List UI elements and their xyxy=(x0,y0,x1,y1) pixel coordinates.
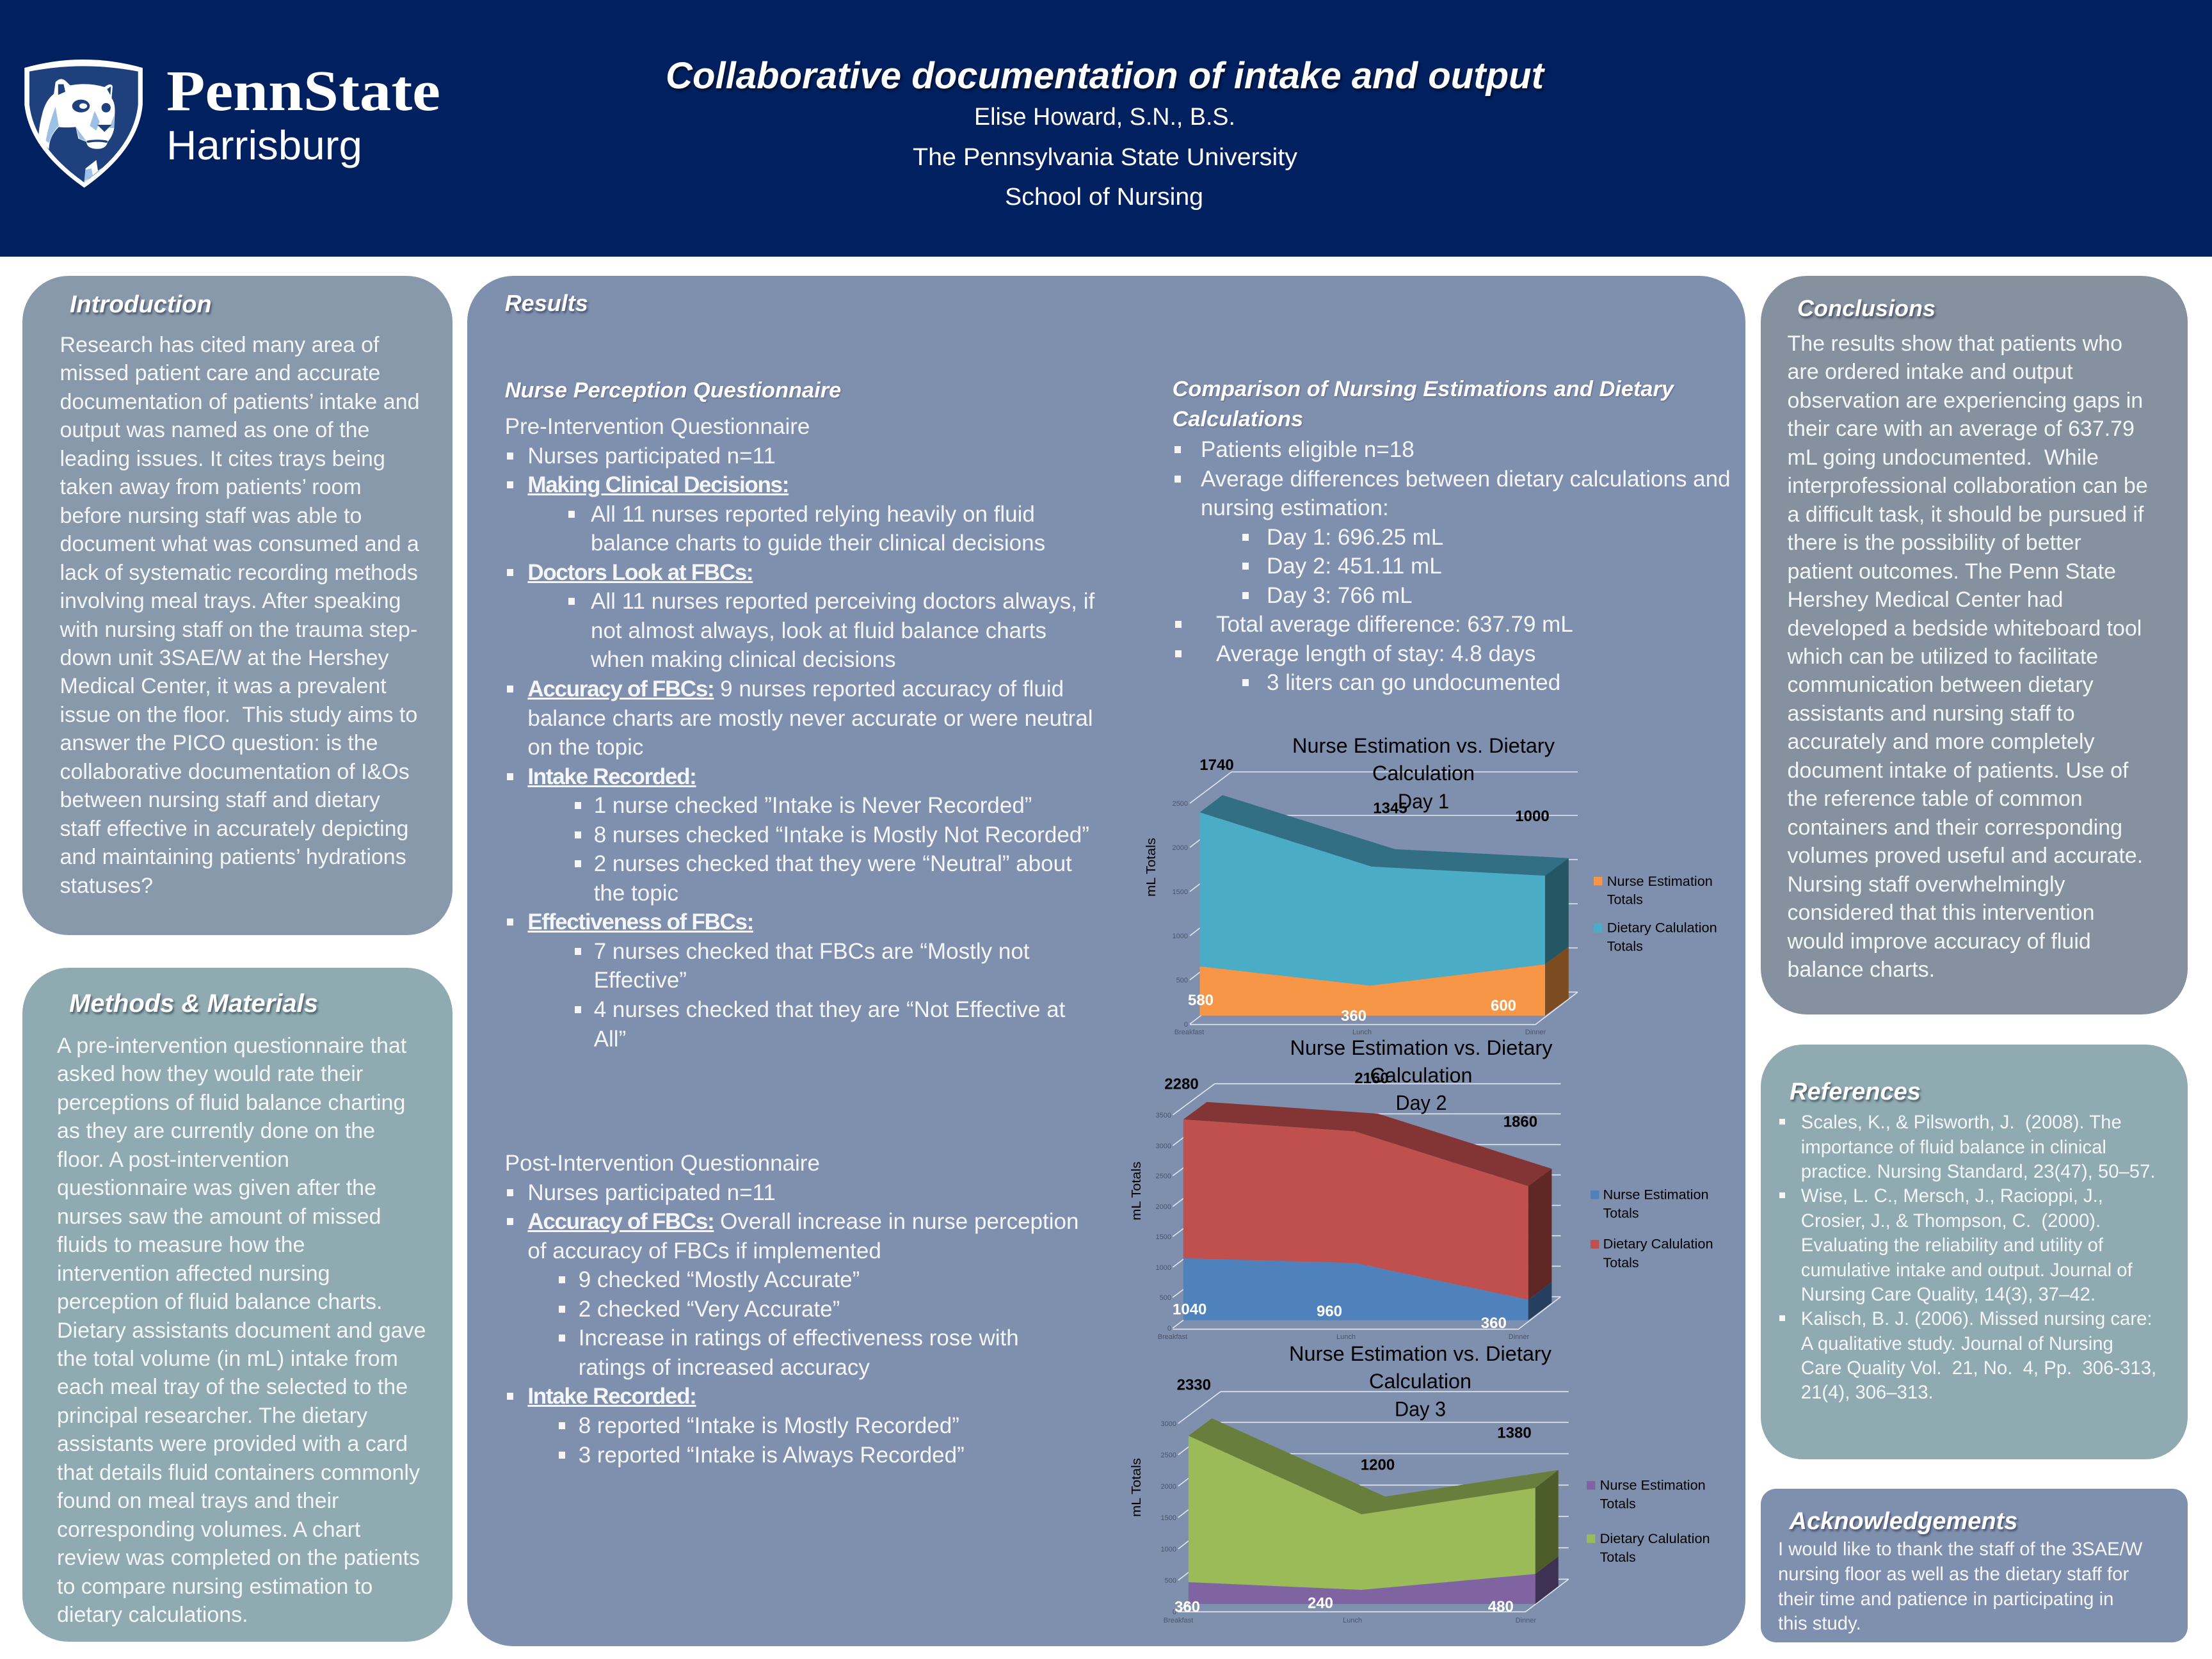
legend: Dietary Calulation xyxy=(1600,1532,1710,1546)
text: post-intervention questionnaire: Intake Recorded: xyxy=(527,1384,696,1409)
text: pre-intervention questionnaire: Pre-Intervention Questionnaire xyxy=(505,414,810,439)
chart title xyxy=(1289,1342,1551,1420)
text: post-intervention questionnaire xyxy=(505,1151,1078,1468)
data labels: 960 xyxy=(1317,1303,1342,1320)
text: pre-intervention questionnaire: All 11 nurses reported relying heavily on fluid xyxy=(591,502,1035,527)
text: pre-intervention questionnaire: All 11 nurses reported perceiving doctors always, if xyxy=(591,589,1094,614)
text: reference list: A qualitative study. Journal of Nursing xyxy=(1801,1333,2113,1354)
y-axis label: mL Totals xyxy=(1130,1162,1144,1221)
gridlines and axes: Lunch xyxy=(1336,1333,1356,1341)
chart: Day 2 area chart xyxy=(1130,1036,1713,1341)
panel: references xyxy=(1761,1045,2188,1459)
data labels: 240 xyxy=(1308,1595,1333,1612)
text: post-intervention questionnaire: Nurses participated n=11 xyxy=(527,1180,776,1205)
author: Elise Howard, S.N., B.S. xyxy=(974,104,1235,131)
text: post-intervention questionnaire: Post-Intervention Questionnaire xyxy=(505,1151,820,1176)
legend: Totals xyxy=(1600,1497,1636,1512)
text: pre-intervention questionnaire: Doctors Look at FBCs: xyxy=(527,560,753,585)
panel: acknowledgements xyxy=(1761,1489,2188,1642)
text: pre-intervention questionnaire: Making Clinical Decisions: xyxy=(527,472,789,497)
legend: Dietary Calulation xyxy=(1607,921,1717,936)
data labels: 2280 xyxy=(1164,1076,1199,1093)
text: pre-intervention questionnaire: 2 nurses checked that they were “Neutral” about xyxy=(594,851,1072,876)
text: pre-intervention questionnaire: Accuracy of FBCs: 9 nurses reported accuracy of fluid xyxy=(527,677,1064,701)
gridlines and axes: 2500 xyxy=(1161,1452,1176,1459)
data labels: 1740 xyxy=(1199,757,1234,774)
text: reference list: Care Quality Vol. 21, No. 4, Pp. 306-313, xyxy=(1801,1358,2156,1379)
text: reference list: Evaluating the reliability and utility of xyxy=(1801,1235,2103,1256)
legend xyxy=(1591,1187,1713,1270)
gridlines and axes: Dinner xyxy=(1516,1617,1537,1624)
area: nurse estimation totals xyxy=(1199,947,1569,1016)
data labels: 360 xyxy=(1341,1007,1366,1025)
gridlines and axes: Lunch xyxy=(1343,1617,1362,1624)
text: pre-intervention questionnaire: Intake Recorded: xyxy=(527,764,696,789)
text: comparison findings: Day 2: 451.11 mL xyxy=(1267,554,1442,579)
gridlines and axes: 3000 xyxy=(1156,1142,1171,1150)
text: methods body: A pre-intervention questionnaire that asked how they would rate their perceptions of fluid balance charting as they are currently done on the floor. A post-intervention questionnaire was given after the nurses saw the amount of missed fluids to measure how the intervention affected nursing perception of fluid balance charts. Dietary assistants document and gave the total volume (in mL) intake from each meal tray of the selected to the principal researcher. The dietary assistants were provided with a card that details fluid containers commonly found on meal trays and their corresponding volumes. A chart review was completed on the patients to compare nursing estimation to dietary calculations. xyxy=(57,1034,426,1627)
data labels: 1860 xyxy=(1503,1114,1537,1131)
gridlines and axes: Lunch xyxy=(1352,1029,1372,1036)
gridlines and axes: 2000 xyxy=(1173,844,1188,852)
text: pre-intervention questionnaire: on the topic xyxy=(527,735,643,760)
data labels: 580 xyxy=(1188,992,1214,1009)
panel: methods and materials xyxy=(22,968,453,1642)
gridlines and axes: 1500 xyxy=(1161,1514,1176,1522)
gridlines and axes: 1000 xyxy=(1156,1264,1171,1272)
text: reference list: cumulative intake and output. Journal of xyxy=(1801,1260,2133,1281)
legend: Nurse Estimation xyxy=(1600,1479,1706,1493)
area: dietary calculation totals xyxy=(1189,1418,1559,1590)
gridlines and axes: 1500 xyxy=(1173,888,1188,896)
text: pre-intervention questionnaire: 1 nurse checked ”Intake is Never Recorded” xyxy=(594,793,1032,818)
subheading: Comparison of Nursing Estimations and Dietary Calculations: Comparison of Nursing Estimations and Dietary Calculations xyxy=(1173,377,1674,431)
gridlines and axes: 2500 xyxy=(1173,800,1188,808)
text: comparison findings: 3 liters can go undocumented xyxy=(1267,670,1560,695)
text: comparison findings: Average differences between dietary calculations and xyxy=(1201,467,1731,492)
gridlines and axes xyxy=(1161,1391,1569,1624)
gridlines and axes: 1500 xyxy=(1156,1233,1171,1241)
legend xyxy=(1594,874,1717,954)
title: Collaborative documentation of intake and output xyxy=(666,55,1546,97)
text: pre-intervention questionnaire: balance charts to guide their clinical decisions xyxy=(591,531,1045,556)
chart title: Day 2 xyxy=(1395,1091,1447,1114)
text: pre-intervention questionnaire: 8 nurses checked “Intake is Mostly Not Recorded” xyxy=(594,822,1089,847)
wordmark: Harrisburg: Harrisburg xyxy=(166,122,362,168)
gridlines and axes: 2000 xyxy=(1156,1203,1171,1211)
data labels xyxy=(1188,757,1550,1025)
text: reference list: Kalisch, B. J. (2006). Missed nursing care: xyxy=(1801,1308,2152,1329)
text: post-intervention questionnaire: of accuracy of FBCs if implemented xyxy=(527,1238,881,1263)
data labels: 2330 xyxy=(1177,1377,1211,1394)
gridlines and axes: Dinner xyxy=(1525,1029,1546,1036)
legend: Dietary Calulation xyxy=(1603,1237,1713,1252)
panel: results xyxy=(467,276,1745,1646)
y-axis label: mL Totals xyxy=(1130,1458,1144,1517)
y-axis label: mL Totals xyxy=(1144,838,1158,897)
heading: Results: Results xyxy=(505,289,588,316)
text: pre-intervention questionnaire: the topic xyxy=(594,881,678,906)
legend xyxy=(1587,1479,1710,1565)
data labels: 1345 xyxy=(1373,800,1407,817)
text: pre-intervention questionnaire: when making clinical decisions xyxy=(591,647,896,672)
text: pre-intervention questionnaire: not almost always, look at fluid balance charts xyxy=(591,618,1046,643)
legend: Totals xyxy=(1603,1256,1639,1270)
data labels xyxy=(1174,1377,1532,1615)
legend: Totals xyxy=(1603,1206,1639,1221)
text: reference list: Scales, K., & Pilsworth, J. (2008). The xyxy=(1801,1112,2122,1133)
text: reference list: 21(4), 306–313. xyxy=(1801,1382,1934,1403)
chart title xyxy=(1292,734,1555,813)
chart: Day 1 area chart xyxy=(1144,734,1717,1036)
data labels: 360 xyxy=(1174,1598,1200,1615)
chart title: Calculation xyxy=(1370,1064,1472,1087)
text: comparison findings xyxy=(1174,437,1731,695)
area: dietary calculation totals xyxy=(1183,1102,1551,1300)
wordmark: PennState: PennState xyxy=(166,60,440,123)
chart title: Calculation xyxy=(1369,1370,1471,1393)
text: acknowledgements body: I would like to thank the staff of the 3SAE/W nursing floor as well as the dietary staff for their time and patience in participating in this study. xyxy=(1778,1539,2142,1634)
gridlines and axes xyxy=(1156,1084,1560,1341)
gridlines and axes: 1000 xyxy=(1161,1546,1176,1553)
text: pre-intervention questionnaire: Effective” xyxy=(594,968,687,993)
gridlines and axes: Breakfast xyxy=(1174,1029,1204,1036)
gridlines and axes xyxy=(1173,772,1578,1036)
text: post-intervention questionnaire: ratings of increased accuracy xyxy=(579,1355,870,1380)
text: pre-intervention questionnaire: 7 nurses checked that FBCs are “Mostly not xyxy=(594,939,1030,964)
text: pre-intervention questionnaire xyxy=(505,414,1094,1052)
text: post-intervention questionnaire: 2 checked “Very Accurate” xyxy=(579,1297,840,1322)
gridlines and axes: 3000 xyxy=(1161,1420,1176,1428)
data labels: 360 xyxy=(1481,1315,1507,1332)
text: conclusions body: The results show that patients who are ordered intake and output observation are experiencing gaps in their care with an average of 637.79 mL going undocumented. While interprofessional collaboration can be a difficult task, it should be pursued if there is the possibility of better patient outcomes. The Penn State Hershey Medical Center had developed a bedside whiteboard tool which can be utilized to facilitate communication between dietary assistants and nursing staff to accurately and more completely document intake of patients. Use of the reference table of common containers and their corresponding volumes proved useful and accurate. Nursing staff overwhelmingly considered that this intervention would improve accuracy of fluid balance charts. xyxy=(1787,332,2148,982)
gridlines and axes: Breakfast xyxy=(1164,1617,1193,1624)
gridlines and axes: 500 xyxy=(1160,1294,1171,1302)
text: comparison findings: Average length of stay: 4.8 days xyxy=(1216,641,1535,666)
heading: References: References xyxy=(1790,1078,1921,1105)
gridlines and axes: 500 xyxy=(1165,1577,1176,1585)
gridlines and axes: 0 xyxy=(1167,1325,1171,1333)
text: comparison findings: Day 3: 766 mL xyxy=(1267,583,1413,608)
text: reference list: Crosier, J., & Thompson, C. (2000). xyxy=(1801,1210,2101,1231)
area: nurse estimation totals xyxy=(1189,1557,1559,1604)
heading: Conclusions: Conclusions xyxy=(1797,295,1936,321)
text: reference list: practice. Nursing Standard, 23(47), 50–57. xyxy=(1801,1161,2156,1182)
gridlines and axes: Dinner xyxy=(1509,1333,1530,1341)
text: pre-intervention questionnaire: Nurses participated n=11 xyxy=(527,444,776,469)
area: dietary calculation totals xyxy=(1199,795,1569,986)
university: The Pennsylvania State University xyxy=(913,144,1297,171)
data labels xyxy=(1164,1070,1537,1332)
subheading: Nurse Perception Questionnaire: Nurse Perception Questionnaire xyxy=(505,378,841,403)
text: reference list: importance of fluid balance in clinical xyxy=(1801,1137,2106,1158)
text: post-intervention questionnaire: Increase in ratings of effectiveness rose with xyxy=(579,1326,1019,1350)
text: pre-intervention questionnaire: 4 nurses checked that they are “Not Effective at xyxy=(594,997,1065,1022)
text: comparison findings: Patients eligible n=18 xyxy=(1201,437,1415,462)
gridlines and axes: 2500 xyxy=(1156,1173,1171,1180)
panel: conclusions xyxy=(1761,276,2188,1014)
text: post-intervention questionnaire: Accuracy of FBCs: Overall increase in nurse perception xyxy=(527,1209,1078,1234)
data labels: 1200 xyxy=(1361,1457,1395,1474)
chart title: Nurse Estimation vs. Dietary xyxy=(1292,734,1555,757)
gridlines and axes: 500 xyxy=(1176,977,1188,984)
chart title: Day 3 xyxy=(1395,1397,1446,1420)
text: post-intervention questionnaire: 8 reported “Intake is Mostly Recorded” xyxy=(579,1413,959,1438)
legend: Nurse Estimation xyxy=(1607,874,1713,889)
text: comparison findings: nursing estimation: xyxy=(1201,495,1389,520)
header banner xyxy=(0,0,2212,257)
panel: introduction xyxy=(22,276,453,935)
legend: Totals xyxy=(1600,1550,1636,1565)
heading: Methods & Materials: Methods & Materials xyxy=(69,990,318,1018)
data labels: 2160 xyxy=(1354,1070,1389,1087)
gridlines and axes: 0 xyxy=(1173,1608,1176,1616)
data labels: 1000 xyxy=(1515,808,1550,825)
gridlines and axes: 1000 xyxy=(1173,933,1188,940)
data labels: 1380 xyxy=(1497,1425,1532,1442)
gridlines and axes: 0 xyxy=(1184,1021,1188,1029)
heading: Acknowledgements: Acknowledgements xyxy=(1790,1508,2017,1535)
school: School of Nursing xyxy=(1005,184,1203,211)
heading: Introduction: Introduction xyxy=(70,291,212,317)
text: pre-intervention questionnaire: Effectiveness of FBCs: xyxy=(527,910,753,934)
gridlines and axes: 3500 xyxy=(1156,1112,1171,1119)
text: pre-intervention questionnaire: balance charts are mostly never accurate or were neutral xyxy=(527,706,1093,731)
gridlines and axes: Breakfast xyxy=(1158,1333,1187,1341)
chart title: Nurse Estimation vs. Dietary xyxy=(1289,1342,1551,1365)
text: reference list: Wise, L. C., Mersch, J., Racioppi, J., xyxy=(1801,1185,2103,1206)
text: post-intervention questionnaire: 9 checked “Mostly Accurate” xyxy=(579,1267,860,1292)
data labels: 1040 xyxy=(1173,1301,1206,1318)
chart title xyxy=(1290,1036,1553,1114)
title block xyxy=(666,55,1548,211)
text: comparison findings: Total average difference: 637.79 mL xyxy=(1216,612,1573,637)
gridlines and axes: 2000 xyxy=(1161,1483,1176,1491)
data labels: 600 xyxy=(1491,997,1516,1014)
text: pre-intervention questionnaire: All” xyxy=(594,1027,626,1052)
legend: Totals xyxy=(1607,893,1643,908)
chart title: Calculation xyxy=(1372,762,1475,785)
text: reference list: Nursing Care Quality, 14(3), 37–42. xyxy=(1801,1284,2096,1305)
text: reference list xyxy=(1779,1112,2156,1403)
text: post-intervention questionnaire: 3 reported “Intake is Always Recorded” xyxy=(579,1443,965,1468)
legend: Totals xyxy=(1607,940,1643,954)
text: introduction body: Research has cited many area of missed patient care and accurate documentation of patients’ intake and output was named as one of the leading issues. It cites trays being taken away from patients’ room before nursing staff was able to document what was consumed and a lack of systematic recording methods involving meal trays. After speaking with nursing staff on the trauma step- down unit 3SAE/W at the Hershey Medical Center, it was a prevalent issue on the floor. This study aims to answer the PICO question: is the collaborative documentation of I&Os between nursing staff and dietary staff effective in accurately depicting and maintaining patients’ hydrations statuses? xyxy=(60,333,420,898)
chart title: Nurse Estimation vs. Dietary xyxy=(1290,1036,1553,1059)
data labels: 480 xyxy=(1488,1598,1514,1615)
area: nurse estimation totals xyxy=(1183,1258,1551,1320)
icon: lion shield xyxy=(24,60,143,188)
logo: Penn State Harrisburg shield and wordmark xyxy=(24,60,440,188)
chart: Day 3 area chart xyxy=(1130,1342,1710,1624)
text: comparison findings: Day 1: 696.25 mL xyxy=(1267,525,1443,550)
chart title: Day 1 xyxy=(1398,790,1449,813)
legend: Nurse Estimation xyxy=(1603,1187,1709,1202)
